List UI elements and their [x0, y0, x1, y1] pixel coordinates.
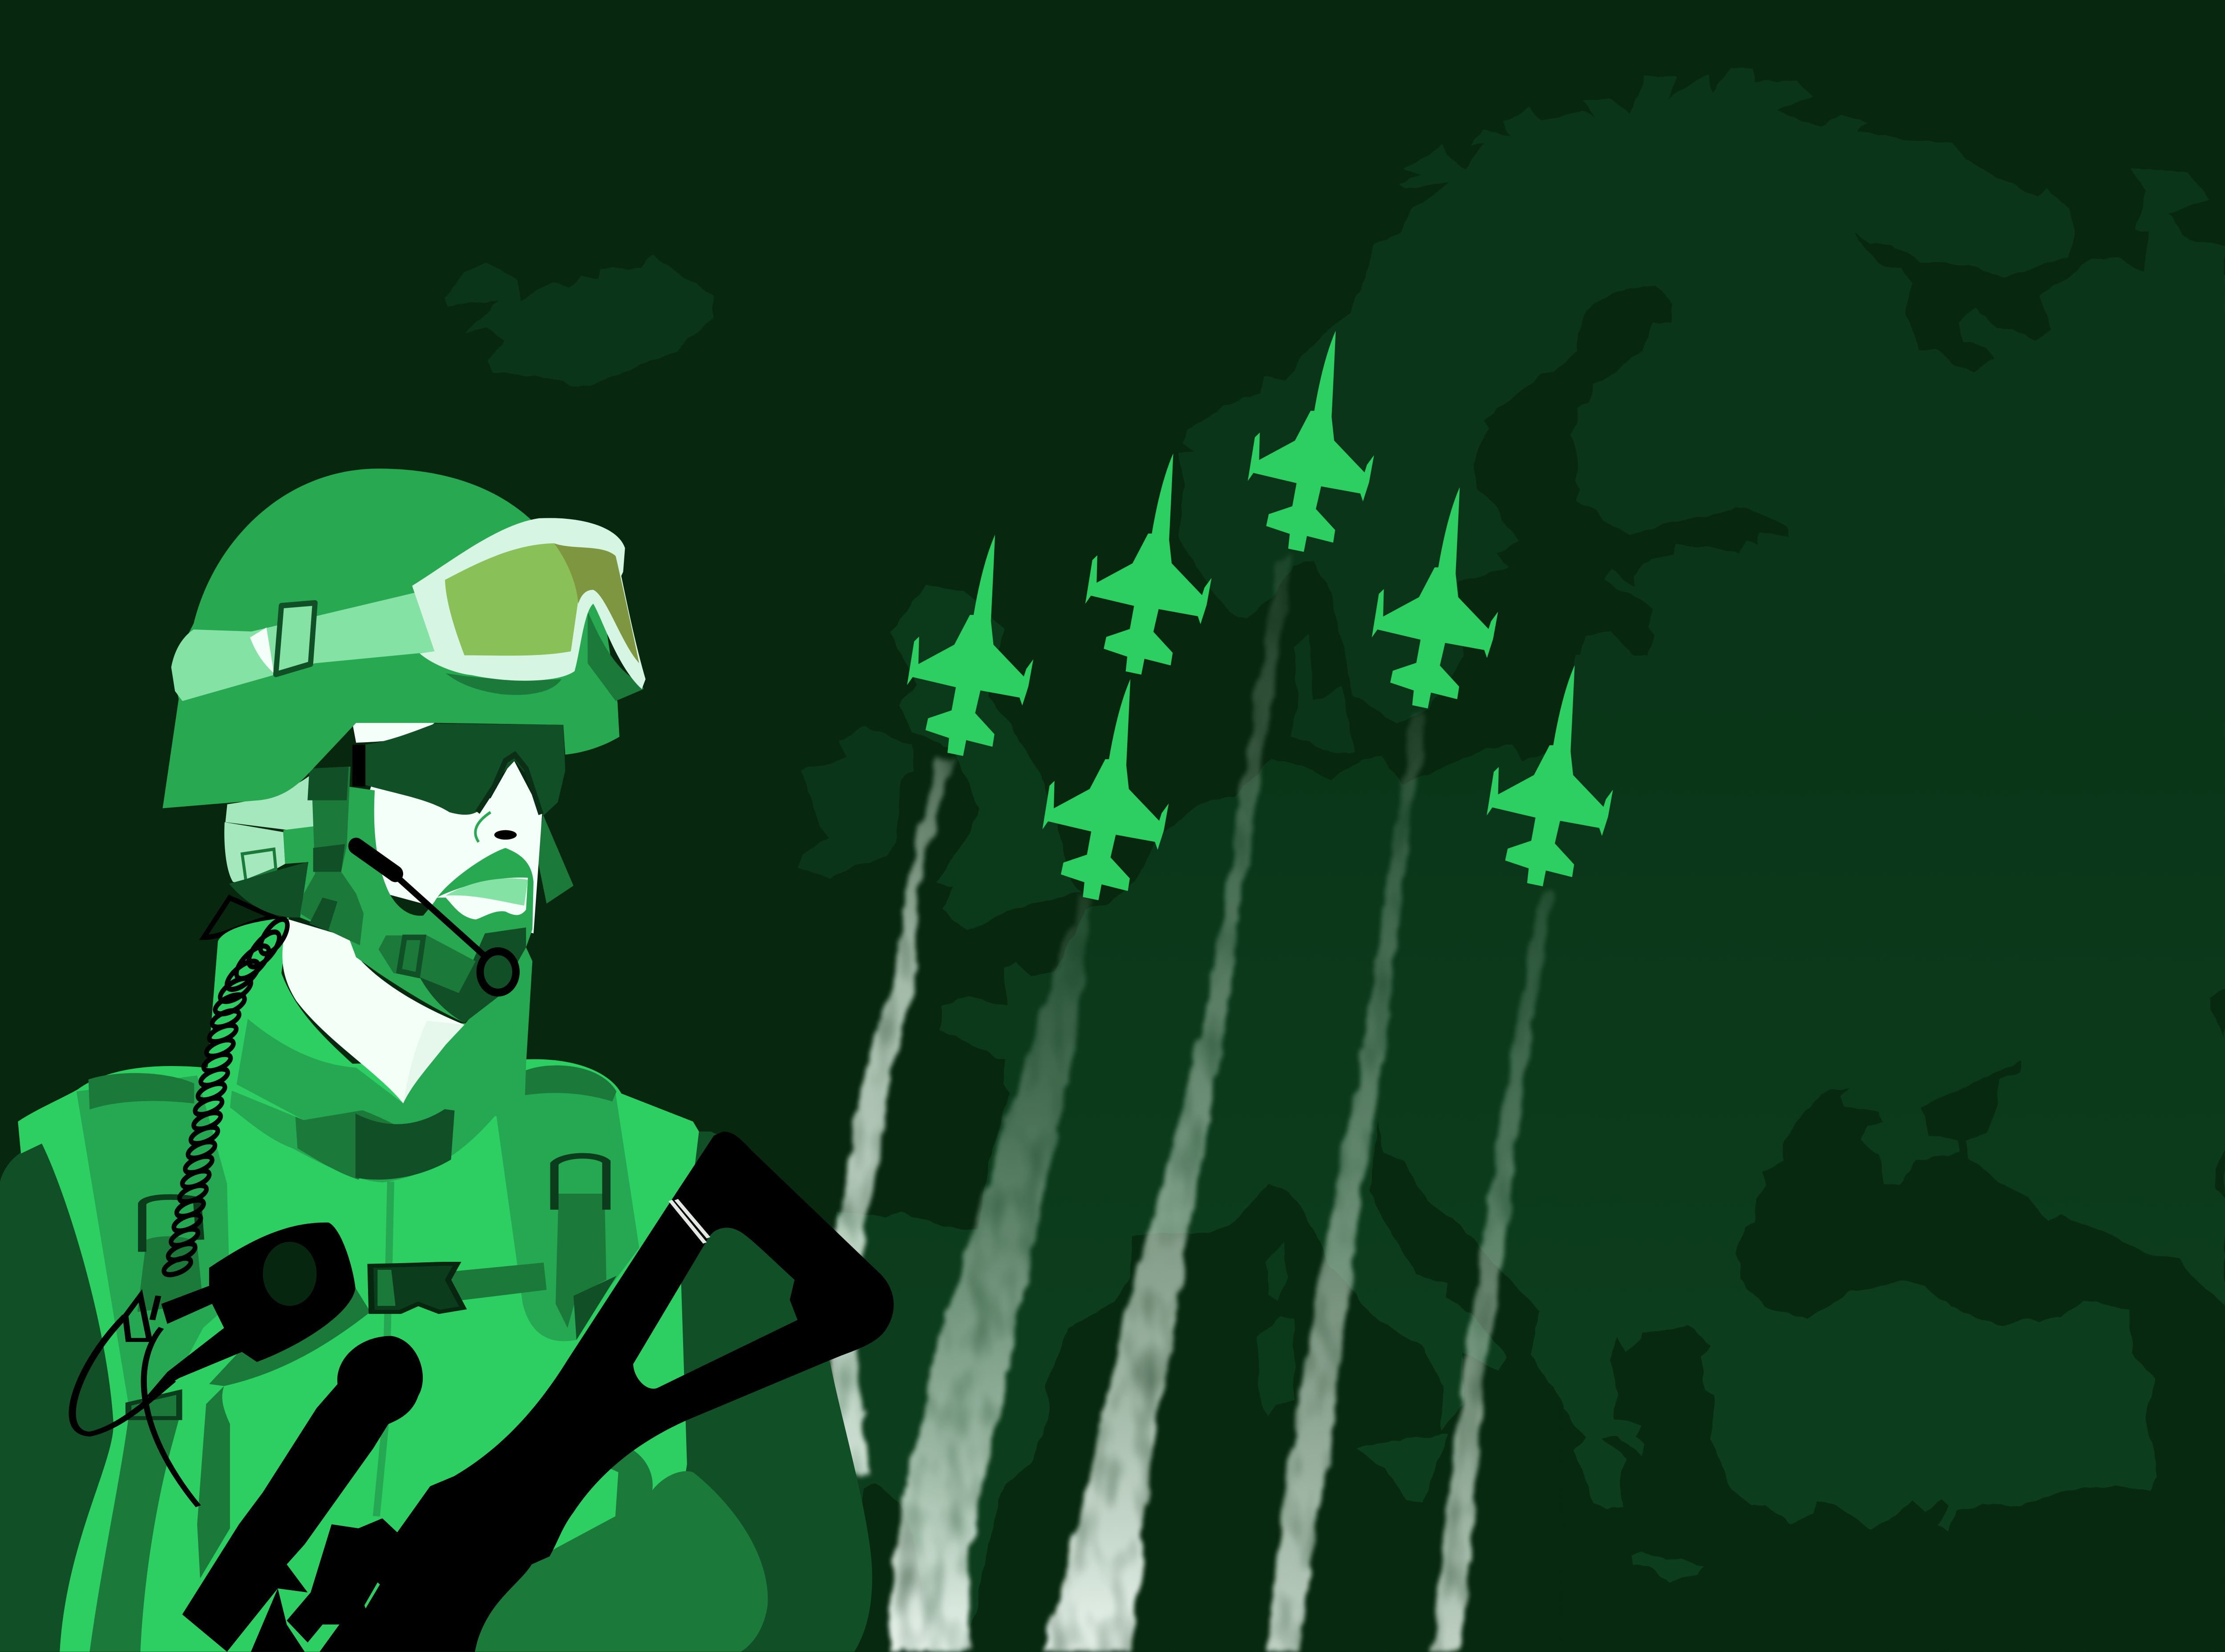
map: Black Sea, Aegean and eastern Mediterranean	[1562, 987, 2225, 1652]
trail: top jet	[1044, 558, 1292, 1652]
D ring left	[142, 1197, 200, 1252]
buckle window	[377, 1270, 396, 1306]
helmet strap	[300, 767, 364, 945]
bright neck collar	[207, 917, 371, 1120]
stock ring	[670, 1200, 708, 1243]
jet: right centre	[1372, 487, 1498, 708]
radio speaker	[263, 1242, 317, 1306]
goggle frame	[412, 518, 646, 689]
microphone tip	[480, 951, 516, 993]
collar right	[403, 947, 532, 1120]
rifle slit	[364, 1583, 380, 1608]
microphone boom	[393, 874, 490, 961]
strap slider	[276, 603, 315, 675]
map: Sardinia	[1257, 1317, 1294, 1415]
pocket left	[138, 1236, 203, 1312]
goggle strap	[171, 590, 438, 701]
collar shade left	[237, 1019, 403, 1120]
sunglasses nose edge	[477, 755, 541, 814]
liner clip	[242, 849, 276, 881]
map: Denmark	[1290, 634, 1355, 752]
goggle lens	[445, 543, 578, 656]
smoke trails	[827, 558, 1553, 1652]
map: Mediterranean and Adriatic	[852, 1123, 1564, 1652]
coiled cord	[162, 914, 292, 1278]
helmet	[162, 469, 619, 808]
trail: left jet	[827, 757, 955, 1473]
helmet right shade	[588, 612, 643, 701]
side pad	[283, 826, 315, 864]
small wire behind neck	[204, 896, 274, 937]
beard	[300, 786, 534, 1023]
strap dark patch top	[307, 767, 348, 800]
handset shadow	[209, 1288, 370, 1386]
nostril	[494, 830, 517, 840]
strap dark patch low	[309, 897, 337, 931]
trail: right jet	[1432, 890, 1553, 1652]
trail: lower centre jet	[887, 898, 1092, 1652]
right shoulder pad	[520, 1065, 616, 1102]
lip	[446, 878, 528, 905]
rifle lower piece	[251, 1588, 305, 1652]
trail: right centre jet	[1266, 712, 1426, 1652]
right pouch	[556, 1194, 607, 1328]
jet: second	[1085, 453, 1212, 675]
vest	[18, 1059, 699, 1652]
D ring right	[554, 1156, 607, 1210]
jet: top	[1248, 331, 1374, 552]
collar inner left	[294, 1095, 400, 1179]
jets formation	[907, 331, 1613, 900]
right pouch shade	[574, 1276, 616, 1340]
map of Europe	[444, 66, 2225, 1652]
collar inner right	[356, 1102, 455, 1179]
map: Iceland	[444, 254, 713, 388]
chin strap	[379, 935, 476, 993]
chin shade	[420, 927, 526, 1023]
lens tint	[554, 543, 639, 663]
left shoulder pad	[89, 1073, 194, 1110]
rifle stock	[287, 1131, 894, 1652]
collar yoke	[230, 1023, 527, 1183]
lower clip	[129, 1392, 179, 1418]
jet: right	[1487, 665, 1613, 886]
boom connector	[356, 846, 395, 874]
vest second strap	[197, 1386, 230, 1579]
left arm	[0, 1143, 113, 1652]
mouth	[437, 877, 528, 920]
wire clip	[125, 1296, 158, 1340]
map: Corsica	[1266, 1242, 1287, 1301]
chest buckle	[370, 1264, 463, 1312]
map: Sicily	[1356, 1434, 1448, 1504]
microphone wire loop	[73, 1316, 173, 1434]
soldier torso	[0, 1023, 894, 1652]
goggle shadow	[446, 673, 562, 695]
neck	[283, 920, 465, 1103]
map: Scandinavia and Finland	[1178, 66, 2225, 723]
chin buckle	[399, 937, 423, 975]
chest strap	[448, 1263, 546, 1302]
liner lower	[224, 822, 285, 886]
map: Great Britain	[890, 586, 1081, 932]
under pad	[229, 862, 312, 917]
temple bar	[352, 745, 365, 786]
nose line	[475, 812, 490, 842]
vest left strap lower	[89, 1418, 179, 1652]
jet: left	[907, 535, 1033, 756]
centre zip	[376, 1182, 391, 1516]
strap white fold	[250, 627, 274, 673]
right arm	[657, 1131, 872, 1652]
liner upper	[225, 775, 315, 830]
soldier head	[162, 469, 646, 1120]
rifle muzzle	[182, 1336, 423, 1652]
face	[341, 723, 542, 933]
strap dark patch mid	[313, 844, 345, 872]
microphone wire down	[144, 1328, 198, 1506]
radio handset	[143, 1223, 356, 1400]
forearm	[472, 1450, 768, 1652]
soldier	[0, 469, 894, 1652]
vest left strap	[77, 1075, 230, 1404]
sunglasses	[364, 723, 565, 816]
jet: lower centre	[1042, 679, 1169, 900]
ear cover	[537, 814, 574, 904]
map: Ireland	[798, 727, 914, 878]
map: continental Europe	[837, 655, 2225, 1652]
vest right strap	[496, 1075, 639, 1341]
neck highlight	[403, 1021, 465, 1103]
